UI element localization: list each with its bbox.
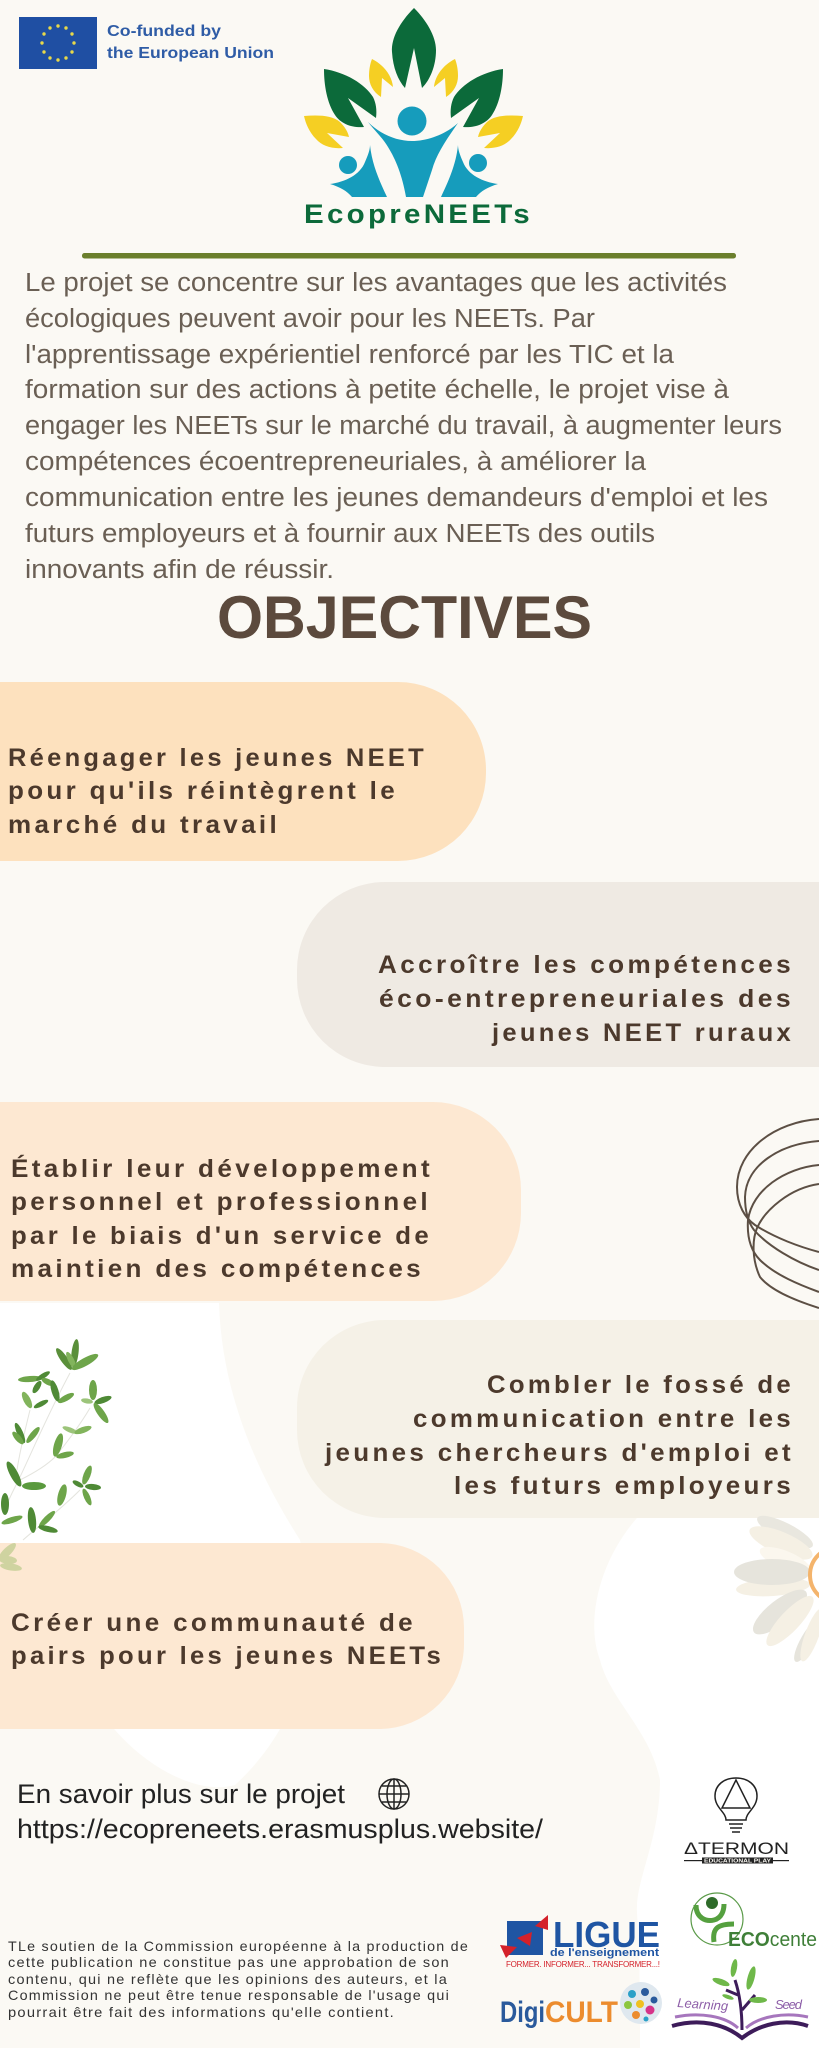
divider bar xyxy=(82,253,736,258)
intro paragraph: futurs employeurs et à fournir aux NEETs des outils xyxy=(25,520,655,548)
objective 2 pill: Accroître les compétences xyxy=(378,951,794,979)
logo wordmark: EcopreNEETs xyxy=(304,199,533,229)
logo: Ligue de l'enseignement: LIGUE xyxy=(553,1914,660,1955)
intro paragraph xyxy=(25,269,782,584)
objective 5 pill: pairs pour les jeunes NEETs xyxy=(11,1642,444,1670)
objective 4 pill: jeunes chercheurs d'emploi et xyxy=(324,1439,794,1467)
disclaimer text: TLe soutien de la Commission européenne à la production de xyxy=(8,1938,469,1954)
objective 1 pill: Réengager les jeunes NEET xyxy=(8,744,427,772)
logo: co-funded by the European Union: the European Union xyxy=(107,45,274,62)
objective 1 pill: pour qu'ils réintègrent le xyxy=(8,777,398,805)
objective 2 pill: éco-entrepreneuriales des xyxy=(379,985,794,1013)
objective 3 pill: maintien des compétences xyxy=(11,1255,424,1283)
disclaimer text: pourrait être fait des informations qu'elle contient. xyxy=(8,2004,395,2020)
logo: Learning Seed xyxy=(672,1959,808,2038)
project link: En savoir plus sur le projet xyxy=(17,1779,346,1809)
intro paragraph: formation sur des actions à petite échelle, le projet vise à xyxy=(25,376,730,404)
objective 2 pill: jeunes NEET ruraux xyxy=(491,1019,794,1047)
disclaimer text: contenu, qui ne reflète que les opinions des auteurs, et la xyxy=(8,1971,448,1987)
project link xyxy=(17,1779,544,1844)
intro paragraph: engager les NEETs sur le marché du travail, à augmenter leurs xyxy=(25,412,782,440)
objective 4 pill: communication entre les xyxy=(413,1405,794,1433)
disclaimer text xyxy=(8,1938,469,2020)
objective 1 pill: marché du travail xyxy=(8,811,280,839)
icon: plant base leaves xyxy=(0,1541,22,1572)
intro paragraph: communication entre les jeunes demandeurs d'emploi et les xyxy=(25,484,768,512)
logo: Ecocenter: ECOcente xyxy=(728,1929,817,1951)
objective 3 pill: personnel et professionnel xyxy=(11,1188,431,1216)
intro paragraph: Le projet se concentre sur les avantages que les activités xyxy=(25,269,727,297)
logo: Ecocenter xyxy=(691,1893,817,1951)
logo: Atermon xyxy=(684,1778,789,1864)
intro paragraph: innovants afin de réussir. xyxy=(25,556,334,584)
logo: Ligue de l'enseignement: FORMER. INFORMER... TRANSFORMER...! xyxy=(506,1960,660,1969)
objective 4 pill: les futurs employeurs xyxy=(454,1472,794,1500)
logo: Atermon: ΔTERMON xyxy=(684,1839,789,1858)
intro paragraph: écologiques peuvent avoir pour les NEETs. Par xyxy=(25,305,596,333)
icon: people figures xyxy=(330,106,498,197)
objective 3 pill: par le biais d'un service de xyxy=(11,1222,432,1250)
icon: yellow leaves xyxy=(304,59,523,148)
logo: EcopreNEETs xyxy=(304,8,533,229)
logo: Learning Seed: Seed xyxy=(775,1997,803,2012)
objective 4 pill: Combler le fossé de xyxy=(487,1371,794,1399)
icon: globe xyxy=(379,1779,409,1809)
logo: co-funded by the European Union: Co-funded by xyxy=(107,23,221,40)
objective 5 pill xyxy=(0,1543,464,1729)
project link: https://ecopreneets.erasmusplus.website/ xyxy=(17,1814,544,1844)
logo: Ligue de l'enseignement xyxy=(500,1914,660,1969)
intro paragraph: l'apprentissage expérientiel renforcé par les TIC et la xyxy=(25,341,675,369)
icon: green leaves xyxy=(324,8,503,127)
logo: Learning Seed: Learning xyxy=(677,1995,729,2014)
disclaimer text: cette publication ne constitue pas une approbation de son xyxy=(8,1954,450,1970)
logo: co-funded by the European Union xyxy=(19,17,274,69)
logo: DigiCULT: CULT xyxy=(545,1996,618,2029)
objective 3 pill: Établir leur développement xyxy=(11,1154,433,1183)
logo: DigiCULT: Digi xyxy=(500,1996,545,2029)
objective 2 pill xyxy=(297,882,819,1067)
objective 4 pill xyxy=(297,1320,819,1518)
heading: OBJECTIVES: OBJECTIVES xyxy=(217,584,592,651)
logo: DigiCULT xyxy=(500,1982,662,2029)
illustration: green plant xyxy=(1,1339,112,1540)
logo: Ligue de l'enseignement: de l'enseignement xyxy=(550,1947,659,1959)
objective 1 pill xyxy=(0,682,486,861)
illustration: daisy flower xyxy=(734,1510,819,1665)
decorative wire rings xyxy=(737,1119,819,1308)
objective 3 pill xyxy=(0,1102,521,1301)
objective 5 pill: Créer une communauté de xyxy=(11,1609,416,1637)
intro paragraph: compétences écoentrepreneuriales, à améliorer la xyxy=(25,448,647,476)
disclaimer text: Commission ne peut être tenue responsable de l'usage qui xyxy=(8,1987,450,2003)
logo: Atermon: EDUCATIONAL PLAY xyxy=(704,1858,772,1864)
